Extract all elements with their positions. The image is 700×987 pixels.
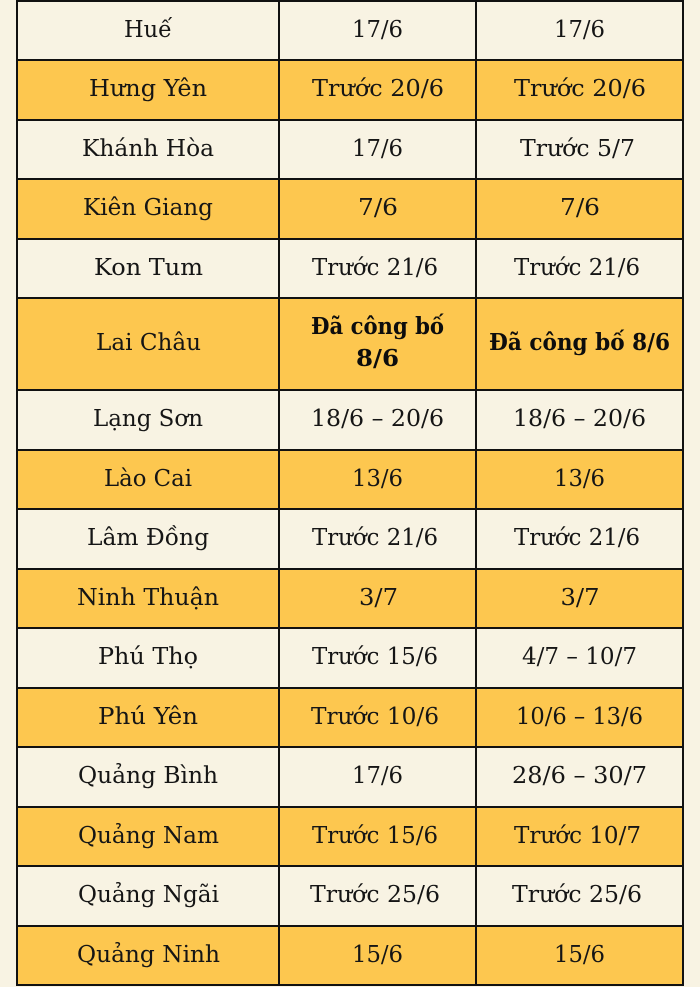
row: Quảng Ngãi: Trước 25/6 [512, 882, 642, 908]
row: Quảng Bình: 28/6 – 30/7 [512, 763, 647, 789]
row: Hưng Yên: Trước 20/6 [514, 76, 646, 102]
row: Kon Tum: Kon Tum [94, 255, 203, 281]
row: Lạng Sơn: Lạng Sơn [93, 406, 203, 432]
row: Lai Châu: 8/6 [356, 345, 399, 372]
row: Kon Tum: Trước 21/6 [312, 255, 438, 281]
row: Huế: 17/6 [352, 17, 403, 43]
row: Quảng Nam: Trước 15/6 [312, 823, 438, 849]
row: Ninh Thuận: 3/7 [359, 585, 398, 611]
row: Quảng Nam: Trước 10/7 [514, 823, 641, 849]
row: Phú Thọ [17, 628, 683, 688]
row: Lào Cai: Lào Cai [104, 466, 192, 492]
row: Kiên Giang: 7/6 [560, 195, 600, 221]
row: Hưng Yên: Trước 20/6 [312, 76, 444, 102]
row: Phú Thọ: 4/7 – 10/7 [522, 644, 637, 670]
row: Phú Yên: Phú Yên [98, 704, 198, 730]
row: Lâm Đồng: Trước 21/6 [312, 525, 438, 551]
row: Quảng Ninh: 15/6 [352, 942, 403, 968]
row: Hưng Yên [17, 60, 683, 120]
row: Quảng Bình: 17/6 [352, 763, 403, 789]
row: Kon Tum: Trước 21/6 [514, 255, 640, 281]
row: Kiên Giang: 7/6 [358, 195, 398, 221]
row: Lạng Sơn [17, 390, 683, 450]
row: Quảng Bình: Quảng Bình [78, 763, 218, 789]
row: Phú Yên: 10/6 – 13/6 [516, 704, 643, 730]
row: Quảng Ninh [17, 926, 683, 985]
row: Huế: Huế [124, 17, 173, 43]
row: Ninh Thuận [17, 569, 683, 628]
row: Khánh Hòa: Khánh Hòa [82, 136, 214, 162]
row: Quảng Ngãi: Trước 25/6 [310, 882, 440, 908]
row: Huế [17, 1, 683, 60]
row: Lai Châu: Đã công bố 8/6 [489, 329, 670, 356]
row: Quảng Ninh: 15/6 [554, 942, 605, 968]
row: Lào Cai: 13/6 [554, 466, 605, 492]
row: Phú Thọ: Trước 15/6 [312, 644, 438, 670]
row: Quảng Ngãi: Quảng Ngãi [78, 882, 219, 908]
row: Quảng Ninh: Quảng Ninh [77, 942, 220, 968]
row: Lào Cai [17, 450, 683, 509]
row: Lạng Sơn: 18/6 – 20/6 [513, 406, 646, 432]
row: Phú Thọ: Phú Thọ [98, 644, 198, 670]
row: Quảng Bình [17, 747, 683, 807]
row: Lâm Đồng: Trước 21/6 [514, 525, 640, 551]
row: Kon Tum [17, 239, 683, 298]
row: Lai Châu: Lai Châu [96, 330, 201, 356]
row: Lạng Sơn: 18/6 – 20/6 [311, 406, 444, 432]
row: Kiên Giang: Kiên Giang [83, 195, 213, 221]
row: Phú Yên [17, 688, 683, 747]
row: Ninh Thuận: Ninh Thuận [77, 585, 219, 611]
row: Quảng Ngãi [17, 866, 683, 926]
row: Lào Cai: 13/6 [352, 466, 403, 492]
row: Huế: 17/6 [554, 17, 605, 43]
row: Lâm Đồng [17, 509, 683, 569]
row: Khánh Hòa: Trước 5/7 [520, 136, 635, 162]
row: Ninh Thuận: 3/7 [560, 585, 600, 611]
row: Hưng Yên: Hưng Yên [89, 76, 207, 102]
row: Phú Yên: Trước 10/6 [311, 704, 439, 730]
row: Khánh Hòa: 17/6 [352, 136, 403, 162]
row: Lai Châu: Đã công bố [311, 313, 445, 340]
row: Quảng Nam [17, 807, 683, 866]
row: Quảng Nam: Quảng Nam [78, 823, 219, 849]
row: Lâm Đồng: Lâm Đồng [87, 525, 209, 551]
row: Khánh Hòa [17, 120, 683, 179]
row: Lai Châu [17, 298, 683, 390]
row: Kiên Giang [17, 179, 683, 239]
